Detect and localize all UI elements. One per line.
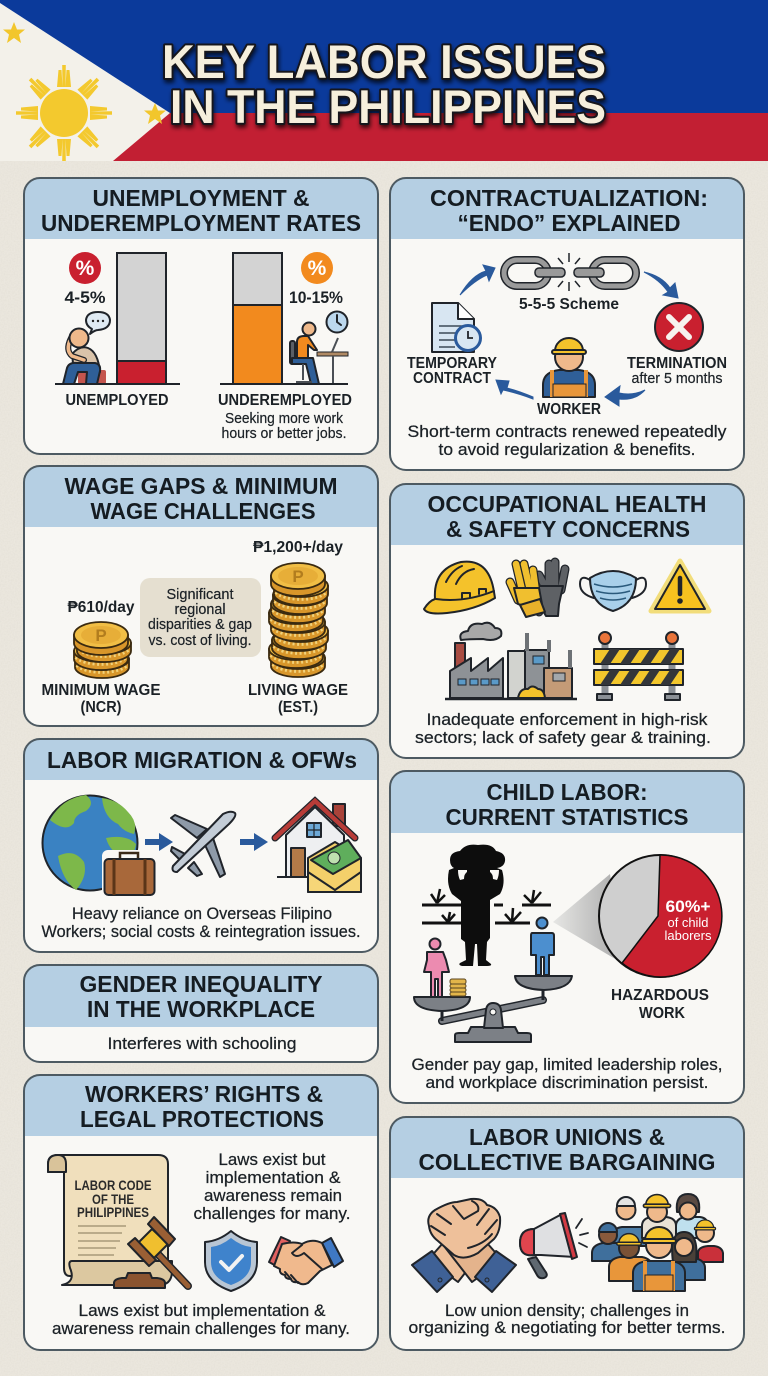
icon: termination x: [655, 303, 703, 351]
description: organizing & negotiating for better terms.: [408, 1319, 726, 1337]
label: termination: TERMINATION: [627, 355, 727, 372]
icon: gavel: [114, 1217, 188, 1288]
heading: [430, 185, 708, 236]
scroll title: PHILIPPINES: [77, 1205, 149, 1220]
pie label: [664, 897, 712, 943]
callout: regional disparities: regional: [174, 602, 226, 618]
description: [42, 905, 360, 941]
text: laws exist: awareness remain: [204, 1187, 342, 1205]
label: minimum wage: [42, 682, 160, 716]
arrow: contract to chain: [460, 265, 495, 295]
text: laws exist: implementation &: [206, 1169, 340, 1187]
icon: house: [275, 801, 355, 877]
icon: person at desk: [290, 322, 348, 384]
label: temporary contract: TEMPORARY: [407, 355, 498, 372]
label: living wage: (EST.): [278, 699, 318, 716]
label: underemployed: UNDEREMPLOYED: [218, 392, 352, 409]
callout: regional disparities: disparities & gap: [148, 617, 252, 633]
label: worker: WORKER: [537, 401, 601, 418]
icon: orange percent badge: [301, 252, 333, 284]
heading: UNEMPLOYMENT &: [92, 185, 310, 211]
arrow: worker to contract: [496, 380, 533, 399]
scroll title: OF THE: [92, 1192, 134, 1207]
arrow: plane to home: [240, 833, 268, 851]
title: KEY LABOR ISSUES: [162, 35, 606, 88]
panel: workers' rights: [24, 1075, 378, 1350]
flag white triangle: [0, 3, 170, 161]
value: living wage: ₱1,200+/day: [253, 539, 343, 556]
front row: [609, 1227, 705, 1291]
icon: factory: [445, 623, 577, 699]
icon: star upper: [3, 22, 25, 43]
icon: shield: [205, 1231, 257, 1291]
label: living wage: [248, 682, 348, 716]
panel: occupational health and safety: [390, 484, 744, 758]
icon: child silhouette carrying load: [448, 845, 505, 966]
underemployed note: Seeking more work: [225, 411, 344, 427]
icon: clock: [326, 312, 348, 332]
description: and workplace discrimination persist.: [426, 1074, 708, 1092]
panel: wage gaps: [24, 466, 378, 726]
description: [408, 423, 727, 459]
description: Gender pay gap, limited leadership roles,: [412, 1056, 722, 1074]
icon: road barricade: [594, 632, 683, 700]
text: laws exist: challenges for many.: [194, 1205, 350, 1223]
icon: money envelope: [308, 840, 361, 892]
stat: 4-5%: 4-5%: [64, 288, 106, 307]
heading: [446, 779, 688, 830]
icon: coins on scale: [450, 979, 466, 996]
figure: woman: [424, 938, 449, 997]
icon: star right: [144, 103, 166, 124]
bar: underemployed: [233, 253, 282, 384]
heading: CONTRACTUALIZATION:: [430, 185, 708, 211]
panel: child labor: [390, 771, 744, 1103]
heading: & SAFETY CONCERNS: [446, 516, 690, 542]
callout: regional disparities: [140, 578, 261, 657]
heading: LABOR UNIONS &: [469, 1124, 665, 1150]
pie label: of child: [668, 915, 708, 930]
panel: unemployment and underemployment rates: [24, 178, 378, 454]
heading: [80, 971, 322, 1022]
icon: airplane: [171, 812, 235, 877]
icon: red percent badge: [69, 252, 101, 284]
icon: suitcase: [102, 850, 157, 897]
description: awareness remain challenges for many.: [52, 1320, 350, 1338]
icon: warning triangle: [651, 561, 709, 611]
title: [162, 35, 606, 133]
description: [415, 711, 711, 747]
description: [412, 1056, 722, 1092]
figure: man: [531, 918, 554, 975]
label: hazardous work: [611, 987, 709, 1022]
label: 5-5-5 scheme: 5-5-5 Scheme: [519, 296, 619, 313]
callout: regional disparities: vs. cost of living.: [148, 633, 252, 649]
label: minimum wage: MINIMUM WAGE: [42, 682, 160, 699]
icon: broken chain: [504, 253, 636, 291]
heading: WAGE GAPS & MINIMUM: [64, 473, 338, 499]
heading: “ENDO” EXPLAINED: [458, 210, 680, 236]
heading: WORKERS’ RIGHTS &: [85, 1081, 323, 1107]
back row: [592, 1194, 723, 1262]
icon: landscape grass: [422, 889, 551, 923]
icon: megaphone: [520, 1213, 588, 1278]
panel: labor migration: [24, 739, 378, 952]
flag banner: [0, 0, 768, 161]
heading: IN THE WORKPLACE: [87, 996, 315, 1022]
label: temporary contract: CONTRACT: [413, 370, 491, 387]
icon: contract document: [432, 303, 480, 352]
icon: face mask: [580, 571, 646, 611]
underemployed note: hours or better jobs.: [222, 426, 346, 442]
description: to avoid regularization & benefits.: [438, 441, 696, 459]
description: Heavy reliance on Overseas Filipino: [72, 905, 332, 923]
label: termination: after 5 months: [632, 371, 722, 387]
heading: LEGAL PROTECTIONS: [80, 1106, 324, 1132]
icon: sun: [16, 65, 112, 161]
heading: OCCUPATIONAL HEALTH: [428, 491, 706, 517]
description: Low union density; challenges in: [445, 1302, 689, 1320]
stat: 10-15%: 10-15%: [289, 288, 343, 307]
heading: [418, 1124, 716, 1175]
description: Short-term contracts renewed repeatedly: [408, 423, 727, 441]
heading: GENDER INEQUALITY: [80, 971, 322, 997]
icon: balance scale with figures: [414, 918, 572, 1042]
label: unemployed: UNEMPLOYED: [66, 392, 168, 409]
heading: LABOR MIGRATION & OFWs: [47, 747, 357, 773]
icon: unemployed person: [63, 328, 106, 384]
axis lines: [55, 383, 348, 385]
heading: [80, 1081, 324, 1132]
description: Workers; social costs & reintegration issues.: [42, 923, 360, 941]
icon: large coin stack: [269, 563, 328, 677]
description: [408, 1302, 726, 1337]
label: hazardous work: HAZARDOUS: [611, 987, 709, 1004]
label: temporary contract: [407, 355, 498, 387]
heading: [64, 473, 338, 524]
description: Laws exist but implementation &: [78, 1302, 326, 1320]
heading: COLLECTIVE BARGAINING: [418, 1149, 716, 1175]
bar: unemployed: [117, 253, 166, 384]
pie label: laborers: [664, 928, 712, 943]
value: minimum wage: ₱610/day: [68, 599, 135, 616]
underemployed note: [222, 411, 346, 442]
description: sectors; lack of safety gear & training.: [415, 729, 711, 747]
title: IN THE PHILIPPINES: [170, 80, 606, 133]
scroll title: LABOR CODE: [74, 1178, 152, 1193]
description: Interferes with schooling: [108, 1035, 296, 1053]
pie label: 60%+: [666, 897, 711, 916]
label: hazardous work: WORK: [639, 1005, 686, 1022]
text: laws exist: [194, 1151, 350, 1223]
label: minimum wage: (NCR): [80, 699, 122, 716]
arrow: termination to worker: [605, 386, 645, 406]
heading: WAGE CHALLENGES: [90, 498, 316, 524]
pie chart: hazardous work: [599, 855, 722, 977]
icon: small coin stack: [74, 622, 131, 678]
label: living wage: LIVING WAGE: [248, 682, 348, 699]
text: laws exist: Laws exist but: [218, 1151, 326, 1169]
heading: CURRENT STATISTICS: [446, 804, 688, 830]
panel: labor unions: [390, 1117, 744, 1350]
icon: red percent badge: %: [76, 257, 95, 280]
icon: safety gloves: [510, 562, 565, 617]
icon: labor code scroll: [48, 1155, 172, 1285]
callout: regional disparities: Significant: [166, 587, 234, 603]
panel: contractualization: [390, 178, 744, 470]
panel: gender inequality: [24, 965, 378, 1062]
icon: handshake: [269, 1237, 343, 1284]
cone pointing to pie: [553, 874, 622, 963]
icon: worker: [543, 338, 595, 397]
icon: group of workers: [592, 1194, 723, 1291]
arrow: globe to plane: [145, 833, 173, 851]
description: [52, 1302, 350, 1338]
description: Inadequate enforcement in high-risk: [426, 711, 708, 729]
heading: CHILD LABOR:: [486, 779, 648, 805]
icon: speech bubble: [86, 312, 110, 334]
heading: [428, 491, 706, 542]
heading: UNDEREMPLOYMENT RATES: [41, 210, 361, 236]
icon: clasped hands: [412, 1199, 516, 1292]
scroll title: [74, 1178, 152, 1220]
arrow: chain to termination: [644, 272, 678, 298]
icon: globe: [42, 795, 138, 890]
icon: hard hat: [424, 562, 495, 614]
label: termination: [627, 355, 727, 387]
heading: [41, 185, 361, 236]
icon: orange percent badge: %: [308, 257, 327, 280]
